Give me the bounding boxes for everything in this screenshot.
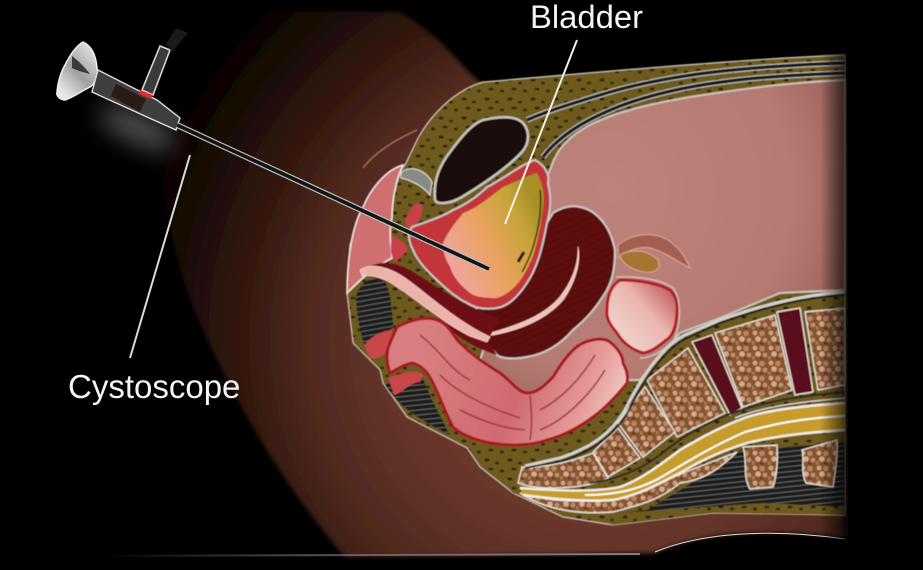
upper vertebral line <box>525 292 845 466</box>
clitoris tissue <box>405 203 422 228</box>
right edge shading <box>820 40 846 550</box>
uterine cavity <box>487 247 579 336</box>
vertebra 2 <box>715 315 792 407</box>
disc 2 <box>692 335 742 415</box>
lower anal muscle <box>385 372 450 435</box>
urethra and vaginal wall <box>362 263 500 355</box>
eyepiece funnel <box>57 42 98 100</box>
eyepiece glow <box>93 96 183 160</box>
scope shaft <box>177 125 489 269</box>
vertebra 1 <box>805 308 845 390</box>
small bowel loop <box>607 280 677 353</box>
bladder wall <box>409 160 550 309</box>
rectum <box>387 318 628 445</box>
label: cystoscope <box>68 155 240 405</box>
light port arm <box>142 28 188 95</box>
scope body <box>92 70 180 130</box>
vulva tissue <box>347 165 403 293</box>
body silhouette <box>100 10 845 557</box>
disc 1 <box>777 308 813 395</box>
pubic bone <box>435 117 528 203</box>
bladder <box>409 160 550 309</box>
spine <box>518 308 845 488</box>
bladder lumen <box>443 173 544 298</box>
fascia layers <box>527 63 845 120</box>
pelvic floor muscle upper <box>355 277 394 346</box>
pubic ligament <box>401 169 432 195</box>
sacrum 2 <box>593 428 640 477</box>
ovary and fallopian tube <box>618 235 690 272</box>
uterus <box>470 206 615 358</box>
fat below spine <box>480 390 845 525</box>
bladder leader line <box>505 40 577 224</box>
cystoscope text: Cystoscope <box>68 368 240 405</box>
abdominal cavity <box>480 80 845 400</box>
label: bladder <box>505 0 643 224</box>
cystoscope <box>57 28 489 269</box>
vertebra 3 <box>647 348 725 437</box>
sacrum 3 <box>518 453 608 488</box>
anatomy cross-section <box>347 40 846 550</box>
sacrum 1 <box>618 387 675 457</box>
rectal muscle folds <box>420 335 605 440</box>
spinous processes <box>520 440 837 513</box>
muscle behind spine <box>620 443 845 513</box>
abdominal wall and fat layer <box>347 55 845 525</box>
eyepiece shadow <box>72 56 90 74</box>
red valve marker <box>139 90 153 99</box>
cystoscope leader line <box>130 155 190 358</box>
spinal canal <box>520 392 845 501</box>
